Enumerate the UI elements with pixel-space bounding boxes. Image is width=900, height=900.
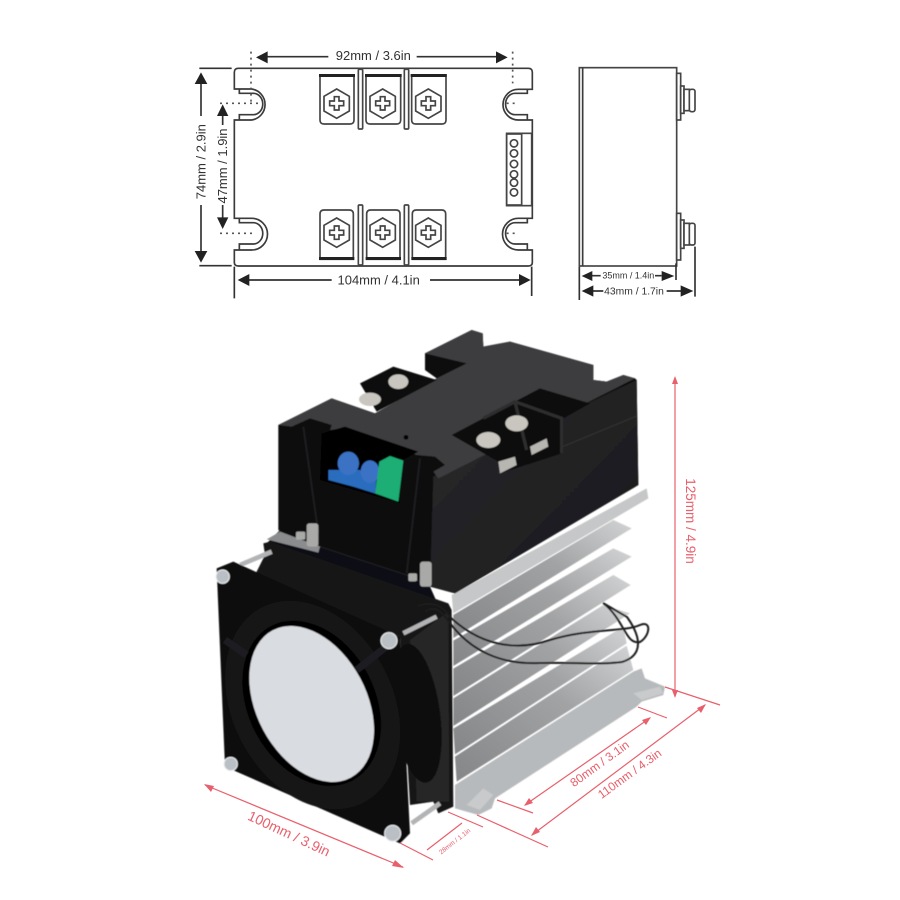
blue potentiometers (328, 452, 379, 493)
dimension 104mm (234, 267, 532, 298)
top terminals (319, 74, 447, 124)
dimension 74mm (194, 68, 232, 266)
fan struts (225, 640, 388, 670)
front terminals (452, 388, 590, 473)
dimension 28mm (400, 812, 483, 860)
upper terminal side (677, 73, 695, 120)
terminal dividers (358, 69, 409, 265)
dimension 28mm: 28mm / 1.1in (438, 827, 472, 856)
dimension 47mm (215, 104, 230, 229)
fan wires (418, 603, 648, 663)
top plate (452, 488, 648, 613)
dimension 35mm (579, 263, 676, 300)
mounting bolts (296, 523, 432, 587)
dimension 43mm: 43mm / 1.7in (604, 287, 664, 298)
corner screws (216, 570, 401, 841)
product photo: relay with heat sink and fan (190, 330, 665, 843)
fan housing (255, 542, 453, 813)
dimension 74mm: 74mm / 2.9in (194, 124, 209, 199)
fan assembly (190, 542, 453, 843)
module body (579, 68, 677, 266)
dimension 92mm: 92mm / 3.6in (336, 48, 411, 63)
dimension 110mm (477, 687, 720, 847)
dimension 43mm (582, 247, 695, 298)
dimension 47mm: 47mm / 1.9in (215, 128, 230, 204)
fan ring (190, 570, 435, 840)
aluminium heat sink (452, 488, 665, 815)
control connector (507, 133, 532, 206)
module outline (234, 68, 532, 266)
green terminal block (375, 456, 403, 502)
top face (278, 330, 635, 478)
dimension 92mm (256, 48, 508, 63)
bottom terminals (319, 210, 447, 260)
fan front frame (217, 562, 410, 843)
dimension 104mm: 104mm / 4.1in (338, 272, 420, 287)
dimension 100mm (204, 784, 404, 868)
dimension 80mm: 80mm / 3.1in (567, 738, 632, 790)
cooling fins (453, 520, 633, 782)
dimension 80mm (497, 707, 667, 813)
ventilation ribs (303, 427, 420, 573)
adjuster recess (320, 427, 418, 503)
dimension 35mm: 35mm / 1.4in (602, 271, 654, 281)
side view technical drawing (579, 68, 695, 300)
black backing silhouette (278, 330, 638, 593)
hole centre dotted guides (220, 52, 518, 233)
silver plate edge (267, 532, 320, 553)
small hole (404, 435, 408, 440)
mounting plate under relay (267, 530, 437, 602)
dimension 125mm: 125mm / 4.9in (683, 478, 698, 564)
front face shoulder line (498, 416, 637, 473)
dimension 100mm: 100mm / 3.9in (246, 807, 333, 859)
top view technical drawing (194, 48, 532, 298)
white hub disc (224, 605, 399, 803)
mounting rods (240, 552, 440, 823)
mounting slots (239, 89, 527, 250)
dimension 110mm: 110mm / 4.3in (595, 746, 664, 802)
rear terminals (359, 353, 467, 412)
lower terminal side (677, 213, 695, 260)
base plate (455, 668, 665, 815)
right face (430, 380, 638, 593)
dimension 125mm (672, 376, 698, 698)
relay body (267, 330, 638, 602)
